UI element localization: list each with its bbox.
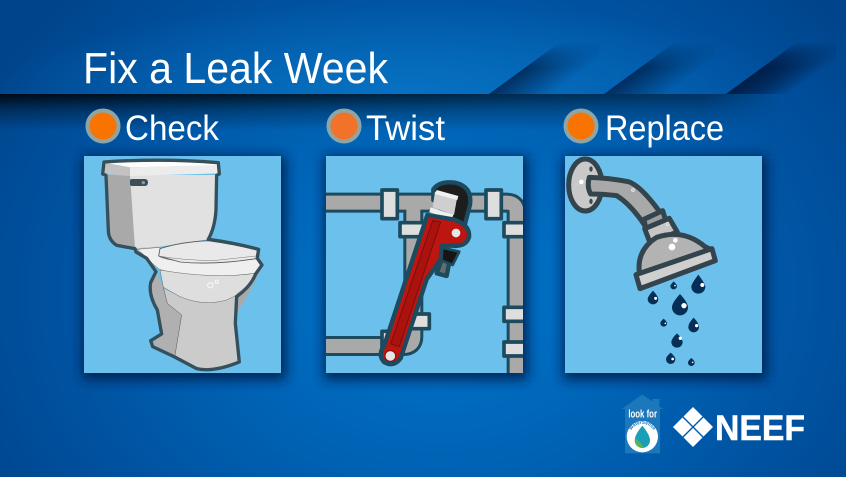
- header band: [0, 33, 834, 127]
- pipes: [320, 203, 517, 377]
- title: Fix a Leak Week: [83, 44, 389, 93]
- step heading: Check: Check: [125, 109, 219, 148]
- logo: look for WaterSense: [622, 394, 663, 454]
- icon: shower head: [569, 159, 715, 366]
- logo: NEEF: [673, 407, 805, 448]
- step heading: Twist: [328, 109, 445, 148]
- logo: NEEF: NEEF: [715, 409, 805, 448]
- panel: shower head: [565, 156, 762, 373]
- panel shadows: [82, 156, 767, 380]
- logo: look for WaterSense: WaterSense: [629, 421, 655, 430]
- step heading: Check: [88, 109, 219, 148]
- water drops: [648, 275, 705, 366]
- wrench jaw: [429, 182, 470, 276]
- step heading: Twist: Twist: [366, 109, 445, 148]
- panel: pipe wrench: [320, 156, 527, 377]
- pipe couplings: [382, 190, 527, 357]
- logo: look for WaterSense: look for: [628, 409, 657, 421]
- icon: NEEF diamonds: [673, 407, 713, 447]
- icon: pipes and wrench: [320, 182, 527, 377]
- icon: toilet: [103, 160, 262, 370]
- step heading: Replace: Replace: [605, 109, 724, 148]
- wrench body: [381, 215, 469, 364]
- panel: toilet: [84, 156, 281, 373]
